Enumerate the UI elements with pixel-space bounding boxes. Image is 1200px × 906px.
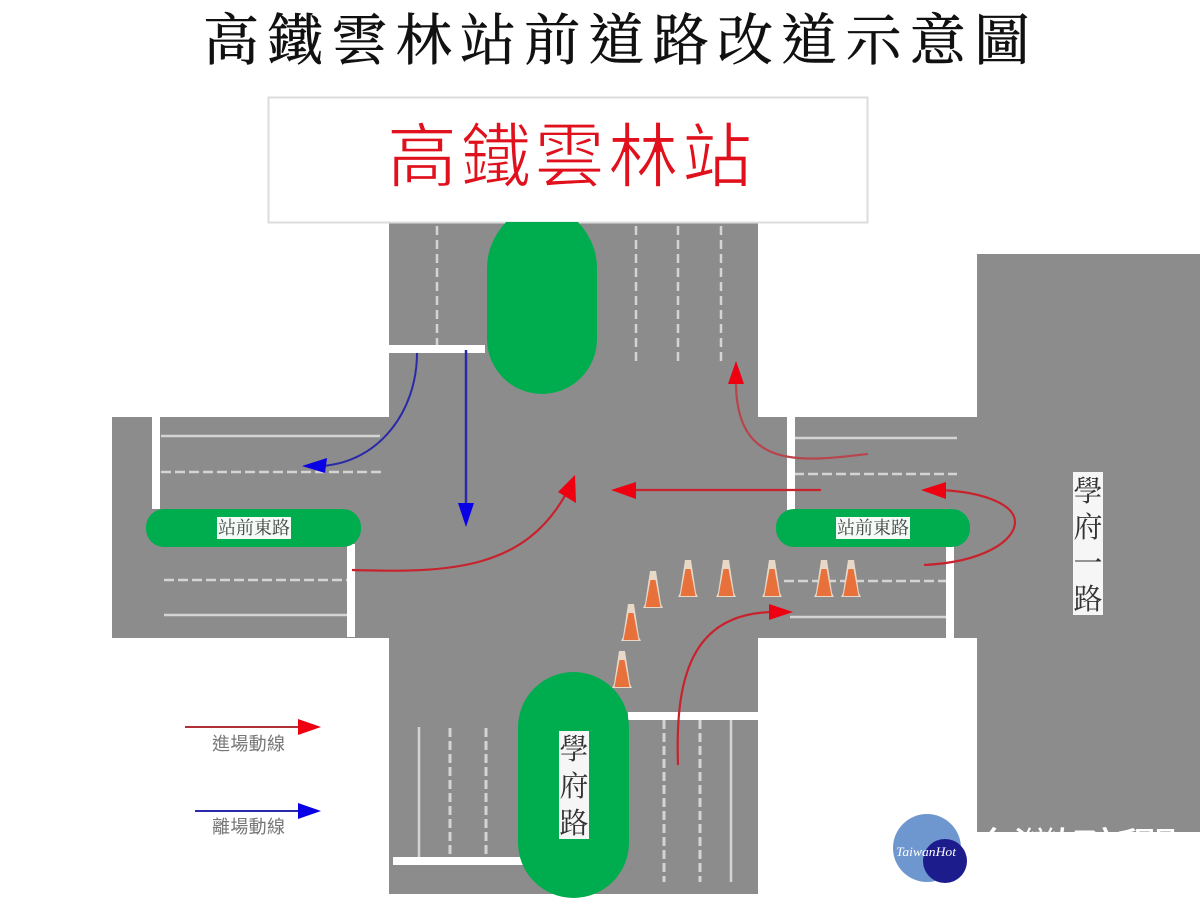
- watermark logo: [893, 814, 967, 883]
- median: west with label: 站前東路: [218, 518, 290, 538]
- watermark text: 台灣好新聞: [974, 824, 1178, 876]
- traffic cones: [612, 560, 861, 688]
- arrow: south right turn: [678, 604, 793, 765]
- station sign panel: [268, 98, 868, 222]
- title: 高鐵雲林站前道路改道示意圖: [203, 11, 1030, 73]
- watermark logo: TaiwanHot: [896, 844, 956, 859]
- median: north: [487, 222, 597, 394]
- median: south with label: 路: [560, 807, 589, 840]
- lane markings: [161, 226, 957, 882]
- legend: exit route: [195, 803, 321, 837]
- station name: 高鐵雲林站: [387, 118, 752, 196]
- road label: 學府一路: 一: [1074, 548, 1103, 580]
- median: south with label: [518, 672, 629, 898]
- arrow: exit curve west: [302, 353, 417, 473]
- legend: exit route: 離場動線: [212, 817, 285, 837]
- median: south with label: 學: [560, 733, 589, 766]
- road label: 學府一路: 路: [1074, 583, 1103, 616]
- median: east with label: 站前東路: [837, 518, 909, 538]
- arrow: right turn north: [728, 361, 868, 459]
- arrow: east U-turn: [921, 482, 1015, 565]
- median: west with label: [146, 509, 361, 547]
- arrow: west entry curve: [352, 475, 576, 571]
- road label: 學府一路: [1073, 472, 1103, 616]
- arrow: exit straight south: [458, 350, 474, 527]
- road surface: [112, 222, 1200, 894]
- legend: entry route: [185, 719, 321, 754]
- median: east with label: [776, 509, 970, 547]
- road label: 學府一路: 府: [1074, 511, 1103, 544]
- arrow: straight west: [611, 482, 821, 499]
- road label: 學府一路: 學: [1074, 475, 1103, 508]
- legend: entry route: 進場動線: [212, 734, 285, 754]
- stop lines: [152, 345, 954, 865]
- median: south with label: 府: [560, 770, 589, 803]
